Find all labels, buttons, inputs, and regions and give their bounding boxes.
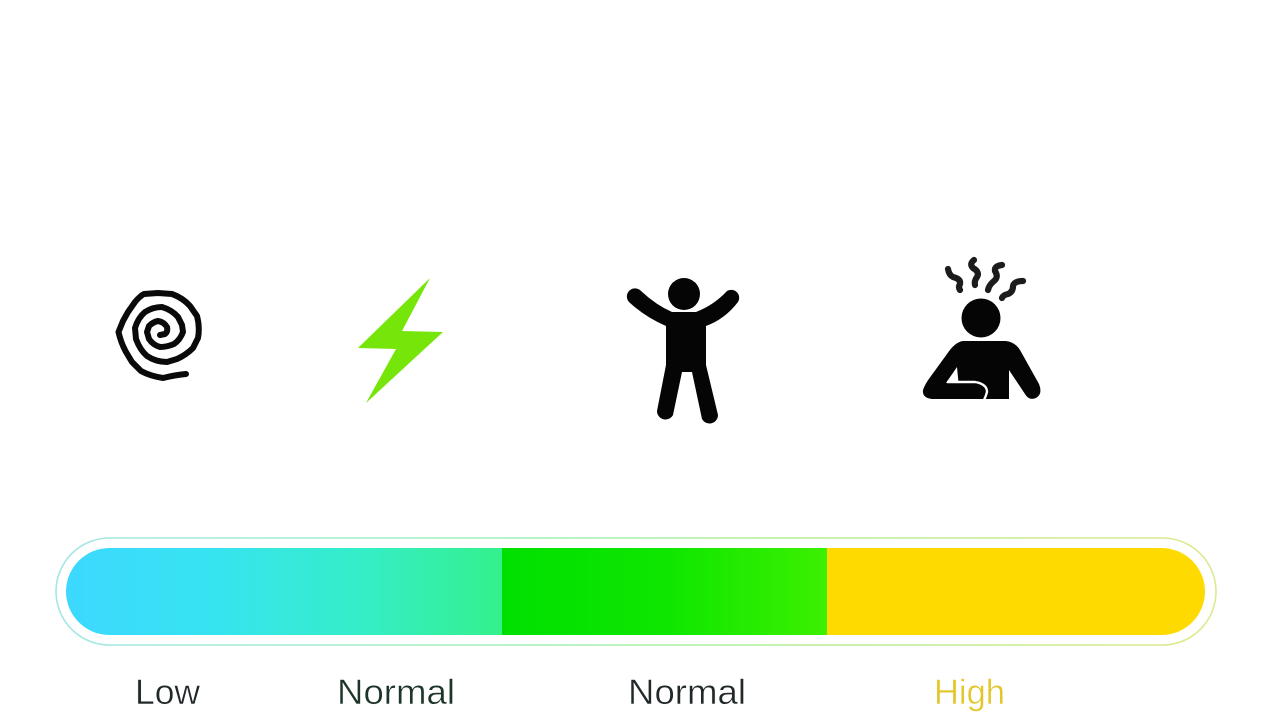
bar outline	[56, 538, 1216, 645]
label: normal left: Normal	[337, 673, 455, 712]
icon: lightning bolt	[358, 278, 443, 403]
segment: normal	[502, 548, 827, 635]
label: high: High	[934, 673, 1005, 712]
icon: stressed person	[923, 260, 1040, 400]
stress squiggles	[948, 260, 1023, 298]
head	[962, 298, 1000, 338]
gauge bar	[56, 538, 1216, 645]
infographic canvas	[55, 256, 1217, 712]
label: low: Low	[135, 673, 201, 712]
bar segments	[66, 548, 1205, 635]
segment: high	[827, 548, 1205, 635]
label: normal right: Normal	[628, 673, 746, 712]
torso and arms	[923, 341, 1040, 399]
icon: spiral	[118, 293, 199, 378]
icon: person with raised arms	[627, 278, 739, 424]
forearm outline	[947, 382, 987, 400]
segment: low	[66, 548, 502, 635]
